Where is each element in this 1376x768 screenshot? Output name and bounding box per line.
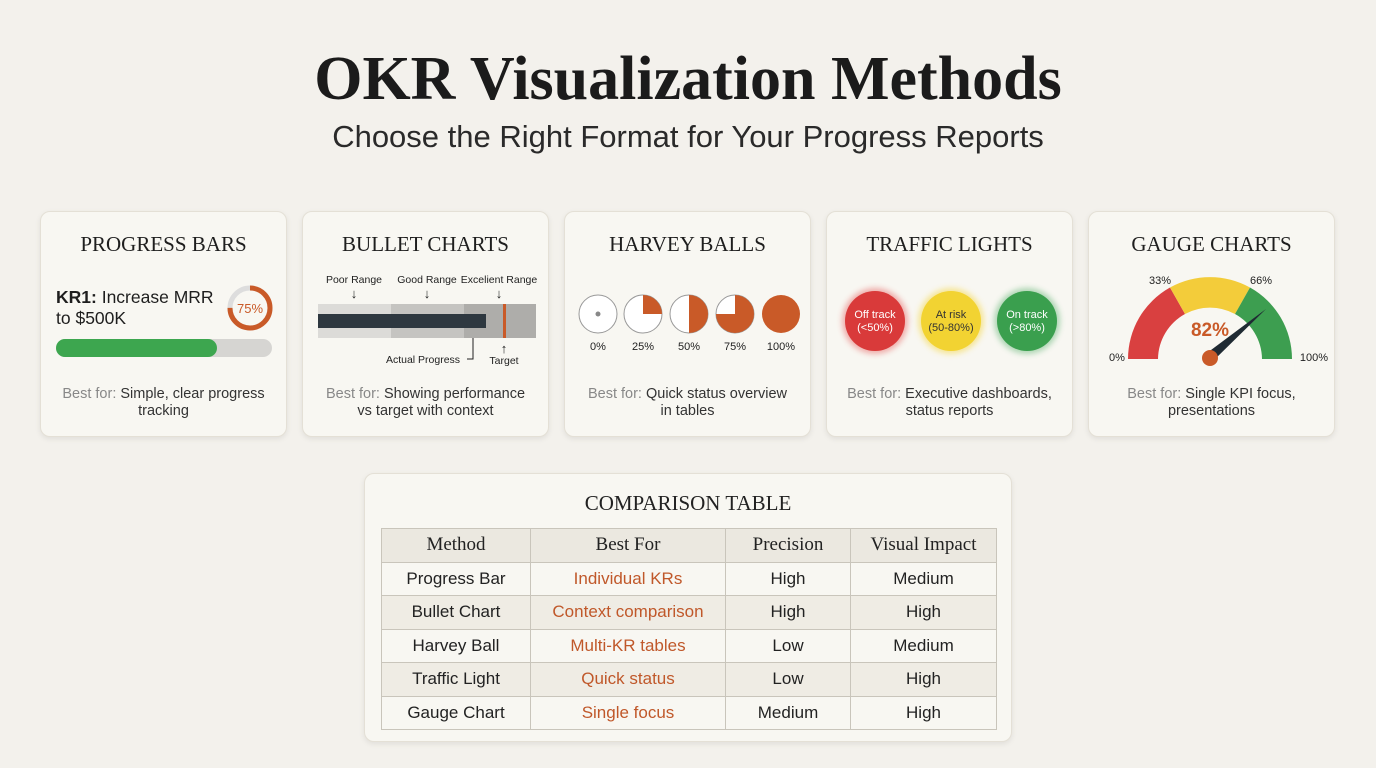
table: Low	[772, 636, 804, 655]
icon: 75% ring	[228, 286, 272, 330]
panel: gauge charts	[1088, 211, 1335, 437]
text: KR1	[56, 287, 214, 328]
title: OKR Visualization Methods	[314, 45, 1062, 113]
traffic light circles: (>80%)	[1009, 322, 1045, 334]
traffic light circles: (<50%)	[857, 322, 893, 334]
table: Context comparison	[552, 602, 704, 621]
bullet chart: Excelient Range	[461, 274, 537, 286]
table: Gauge Chart	[407, 703, 505, 722]
table: High	[906, 703, 941, 722]
progress bar	[56, 339, 272, 357]
table: High	[906, 669, 941, 688]
panel: progress bars: Best for: Simple, clear progress	[62, 386, 265, 402]
panel: bullet charts	[302, 211, 549, 437]
harvey balls	[578, 294, 800, 353]
table: Visual Impact	[871, 534, 976, 555]
text: KR1: to $500K	[56, 308, 126, 328]
table	[381, 528, 997, 730]
gauge chart: 100%	[1300, 352, 1328, 364]
table: Method	[426, 534, 486, 555]
table: Best For	[596, 534, 660, 555]
panel: bullet charts: BULLET CHARTS	[342, 232, 509, 256]
table: Medium	[893, 569, 954, 588]
gauge chart: 82%	[1191, 320, 1229, 341]
table: Single focus	[582, 703, 674, 722]
traffic light circles	[838, 284, 1064, 358]
bullet chart: Poor Range	[326, 274, 382, 286]
table: Progress Bar	[406, 569, 506, 588]
heading: COMPARISON TABLE	[585, 491, 791, 515]
table: Individual KRs	[574, 569, 682, 588]
panel: harvey balls: Best for: Quick status overview	[588, 386, 787, 402]
panel: comparison table	[364, 473, 1012, 742]
table: Bullet Chart	[412, 602, 500, 621]
gauge chart: 66%	[1250, 275, 1272, 287]
bullet chart	[318, 274, 537, 367]
panel: harvey balls: in tables	[660, 403, 714, 419]
subtitle: Choose the Right Format for Your Progress Reports	[332, 119, 1044, 154]
table: High	[771, 569, 805, 588]
gauge chart	[1109, 275, 1328, 366]
traffic light circles: (50-80%)	[928, 322, 974, 334]
panel: gauge charts: presentations	[1168, 403, 1255, 419]
bullet chart: ↓	[496, 286, 502, 301]
panel: gauge charts: GAUGE CHARTS	[1131, 232, 1292, 256]
traffic light circles: On track	[1006, 309, 1048, 321]
table: Traffic Light	[412, 669, 500, 688]
table: Quick status	[581, 669, 675, 688]
harvey balls: 100%	[767, 341, 795, 353]
table: Multi-KR tables	[570, 636, 686, 655]
panel: traffic lights	[826, 211, 1073, 437]
bullet chart: ↓	[424, 286, 430, 301]
panel: progress bars	[40, 211, 287, 437]
table: Low	[772, 669, 804, 688]
harvey balls: 50%	[678, 341, 700, 353]
table: High	[906, 602, 941, 621]
icon: 75% ring: 75%	[237, 301, 263, 316]
panel: harvey balls: HARVEY BALLS	[609, 232, 766, 256]
table: High	[771, 602, 805, 621]
panel: progress bars: PROGRESS BARS	[80, 232, 247, 256]
panel: progress bars: tracking	[138, 403, 189, 419]
table: Harvey Ball	[413, 636, 499, 655]
traffic light circles: At risk	[936, 309, 967, 321]
harvey balls: 25%	[632, 341, 654, 353]
table: Medium	[758, 703, 818, 722]
panel: traffic lights: status reports	[906, 403, 993, 419]
panel: traffic lights: TRAFFIC LIGHTS	[866, 232, 1033, 256]
text: KR1: KR1: Increase MRR	[56, 287, 214, 307]
gauge chart: 33%	[1149, 275, 1171, 287]
bullet chart: Target	[489, 355, 519, 367]
panel: bullet charts: Best for: Showing performance	[326, 386, 525, 402]
panel: bullet charts: vs target with context	[357, 403, 494, 419]
harvey balls: 0%	[590, 341, 606, 353]
traffic light circles: Off track	[854, 309, 896, 321]
bullet chart: ↓	[351, 286, 357, 301]
table: Precision	[753, 534, 823, 555]
bullet chart: Actual Progress	[386, 354, 460, 366]
bullet chart: ↑	[501, 341, 507, 356]
panel: gauge charts: Best for: Single KPI focus,	[1127, 386, 1296, 402]
harvey balls: 75%	[724, 341, 746, 353]
table: Medium	[893, 636, 954, 655]
gauge chart: 0%	[1109, 352, 1125, 364]
panel: harvey balls	[564, 211, 811, 437]
bullet chart: Good Range	[397, 274, 457, 286]
panel: traffic lights: Best for: Executive dashboards,	[847, 386, 1052, 402]
